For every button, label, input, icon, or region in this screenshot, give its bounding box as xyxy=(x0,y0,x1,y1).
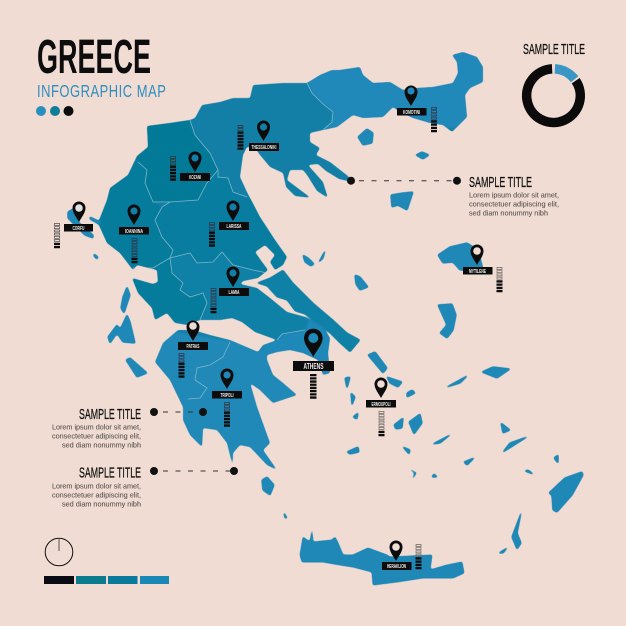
donut chart with title xyxy=(523,41,585,122)
callout: left lower: Lorem ipsum dolor sit amet, xyxy=(52,482,141,490)
pin: Mytilene xyxy=(463,244,502,292)
donut chart with title: SAMPLE TITLE xyxy=(523,41,585,58)
callout: right: Lorem ipsum dolor sit amet, xyxy=(469,190,559,200)
title: GREECE xyxy=(37,31,151,84)
callout: left lower: SAMPLE TITLE xyxy=(79,464,141,482)
pin: Patras: PATRAS xyxy=(186,344,200,350)
pin: Larissa xyxy=(209,200,249,247)
pin: Heraklion xyxy=(382,540,422,570)
callout: left upper: sed diam nonummy nibh xyxy=(62,440,141,450)
map: islands xyxy=(68,129,583,585)
map: mainland regions xyxy=(97,52,484,469)
pin: Ermoupoli xyxy=(366,378,396,436)
pin: Corfu: CORFU xyxy=(72,226,85,232)
callout: right xyxy=(347,174,559,218)
pin: Patras xyxy=(178,320,208,378)
pin: Ermoupoli: ERMOUPOLI xyxy=(372,402,391,408)
pin: Thessaloniki xyxy=(238,120,279,151)
pin: Komotini xyxy=(397,86,437,132)
pin: Tripoli: TRIPOLI xyxy=(220,393,234,399)
pin: Athens: ATHENS xyxy=(304,362,324,371)
pin: Lamia xyxy=(210,266,249,313)
pin: Ioannina: IOANNINA xyxy=(125,229,143,235)
callout: left upper: consectetuer adipiscing elit, xyxy=(52,432,141,440)
pin: Lamia: LAMIA xyxy=(228,290,240,296)
pin: Larissa: LARISSA xyxy=(226,224,242,230)
subtitle: INFOGRAPHIC MAP xyxy=(37,82,166,102)
colour dots xyxy=(36,106,74,116)
pin: Tripoli xyxy=(212,368,242,427)
pin: Ioannina xyxy=(119,204,149,263)
pin: Corfu xyxy=(54,202,93,248)
pin: Mytilene: MYTILENE xyxy=(469,269,486,275)
callout: left lower xyxy=(52,464,238,508)
map: region borders xyxy=(133,83,333,399)
callout: left lower: consectetuer adipiscing elit, xyxy=(52,490,141,500)
pin: Athens xyxy=(293,329,334,399)
callout: right: SAMPLE TITLE xyxy=(469,174,532,191)
callout: left upper: Lorem ipsum dolor sit amet, xyxy=(52,422,141,432)
callout: right: sed diam nonummy nibh xyxy=(469,208,548,218)
callout: left upper: SAMPLE TITLE xyxy=(79,406,141,423)
map: land and islands xyxy=(50,40,583,585)
colour legend bars xyxy=(44,576,169,584)
clock icon xyxy=(45,538,73,566)
callout: left lower: sed diam nonummy nibh xyxy=(62,500,141,508)
pin: Komotini: KOMOTINI xyxy=(403,110,420,116)
pin: Thessaloniki: THESSALONIKI xyxy=(252,145,277,151)
pin: Heraklion: HERAKLION xyxy=(387,564,406,570)
callout: left upper xyxy=(52,406,207,450)
callout: right: consectetuer adipiscing elit, xyxy=(469,200,559,208)
pin: Kozani xyxy=(170,152,210,181)
pin: Kozani: KOZANI xyxy=(189,175,201,181)
